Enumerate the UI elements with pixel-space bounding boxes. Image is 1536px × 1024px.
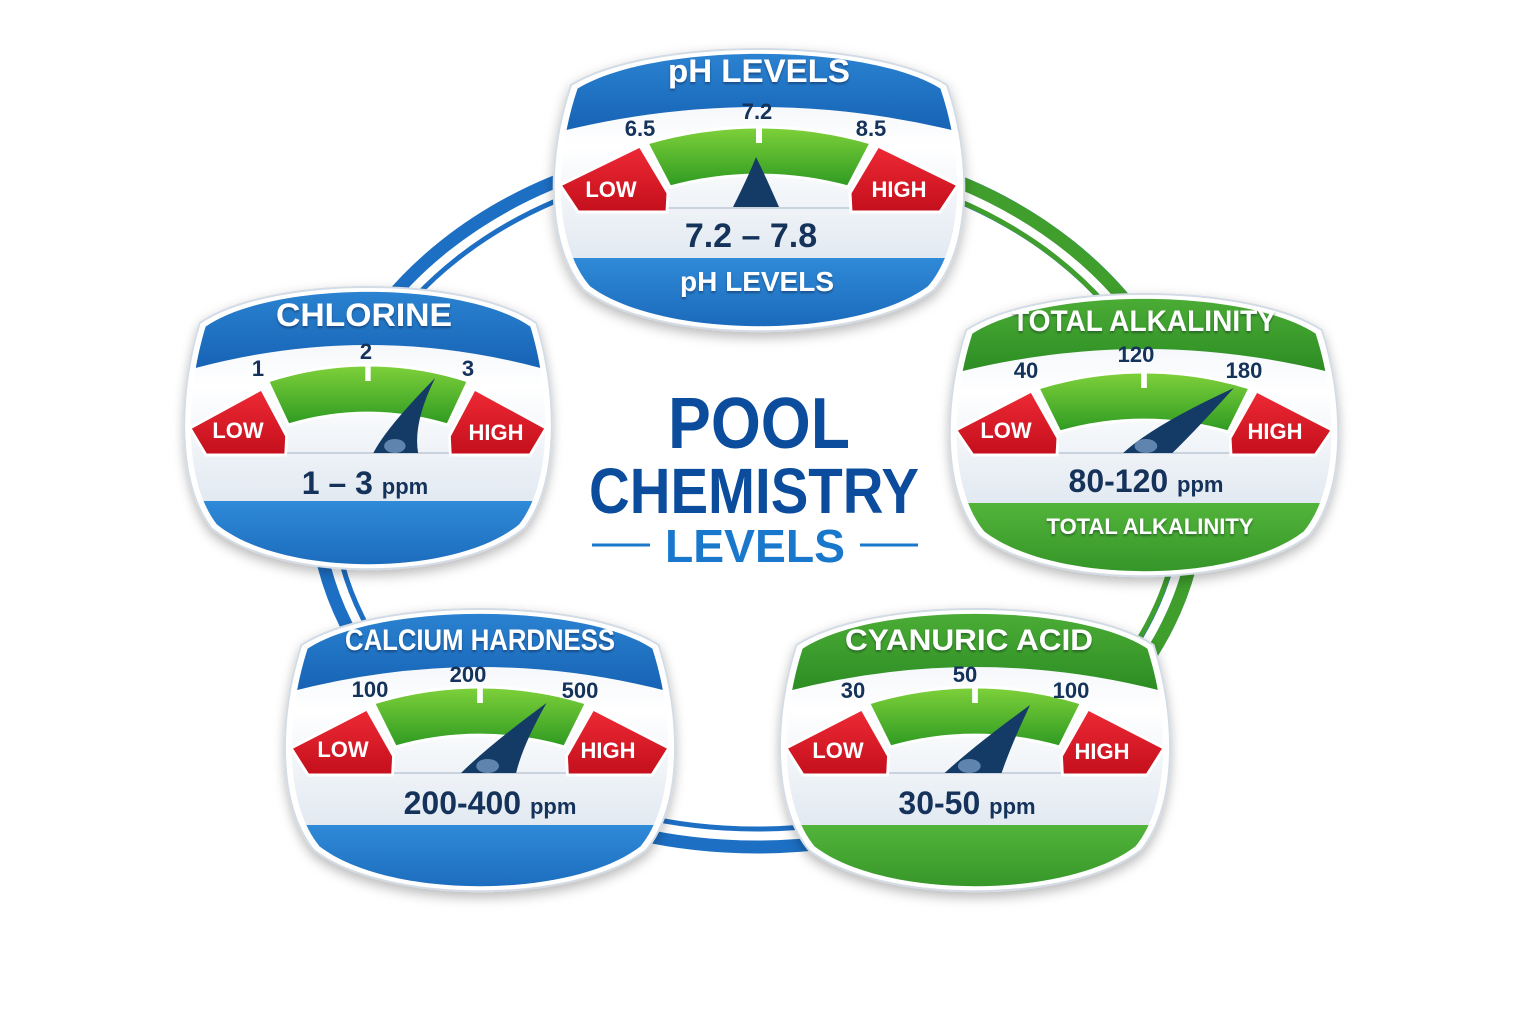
panel: pH levels: [539, 35, 979, 348]
panel: calcium hardness: 500: [562, 678, 598, 703]
panel: pH levels: 8.5: [856, 116, 886, 141]
panel: total alkalinity: LOW: [980, 418, 1032, 443]
panel: calcium hardness: 100: [352, 677, 388, 702]
panel: cyanuric acid: CYANURIC ACID: [845, 624, 1093, 657]
center title: CHEMISTRY: [589, 455, 919, 527]
panel: total alkalinity: 180: [1226, 358, 1262, 383]
panel: chlorine: 3: [462, 356, 474, 381]
panel: pH levels: pH LEVELS: [680, 266, 834, 297]
panel: total alkalinity: HIGH: [1248, 419, 1302, 444]
panel: cyanuric acid: 100: [1053, 678, 1089, 703]
panel: total alkalinity: [936, 280, 1352, 598]
panel: cyanuric acid: 50: [953, 662, 977, 687]
panel: pH levels: LOW: [585, 177, 637, 202]
panel: chlorine: 2: [360, 339, 372, 364]
center title: POOL: [668, 384, 850, 464]
panel: total alkalinity: 80-120 ppm: [1069, 463, 1223, 499]
panel: cyanuric acid: LOW: [812, 738, 864, 763]
panel: chlorine: CHLORINE: [276, 297, 452, 333]
panel: pH levels: pH LEVELS: [668, 53, 850, 89]
panel: calcium hardness: HIGH: [580, 738, 636, 763]
center title: [589, 384, 919, 572]
panel: calcium hardness: LOW: [317, 737, 369, 762]
panel: pH levels: HIGH: [872, 177, 926, 202]
panel: pH levels: 6.5: [625, 116, 655, 141]
panel: calcium hardness: [271, 595, 689, 915]
panel: total alkalinity: 40: [1014, 358, 1038, 383]
center title: LEVELS: [665, 520, 845, 572]
panel: pH levels: 7.2: [742, 99, 772, 124]
panel: cyanuric acid: 30: [841, 678, 865, 703]
panel: cyanuric acid: [766, 595, 1184, 915]
panel: chlorine: [171, 273, 565, 591]
panel: cyanuric acid: HIGH: [1074, 739, 1130, 764]
panel: cyanuric acid: 30-50 ppm: [898, 785, 1036, 821]
panel: total alkalinity: TOTAL ALKALINITY: [1047, 514, 1254, 539]
panel: chlorine: 1 – 3 ppm: [302, 465, 428, 501]
ring connector: [315, 143, 1199, 847]
panel: chlorine: 1: [252, 356, 264, 381]
panel: calcium hardness: 200: [450, 662, 486, 687]
panel: total alkalinity: TOTAL ALKALINITY: [1012, 305, 1276, 338]
panel: calcium hardness: CALCIUM HARDNESS: [345, 624, 615, 657]
panel: chlorine: HIGH: [468, 420, 524, 445]
panel: total alkalinity: 120: [1118, 342, 1154, 367]
panel: pH levels: 7.2 – 7.8: [685, 217, 817, 255]
panel: calcium hardness: 200-400 ppm: [404, 785, 576, 821]
panel: chlorine: LOW: [212, 418, 264, 443]
